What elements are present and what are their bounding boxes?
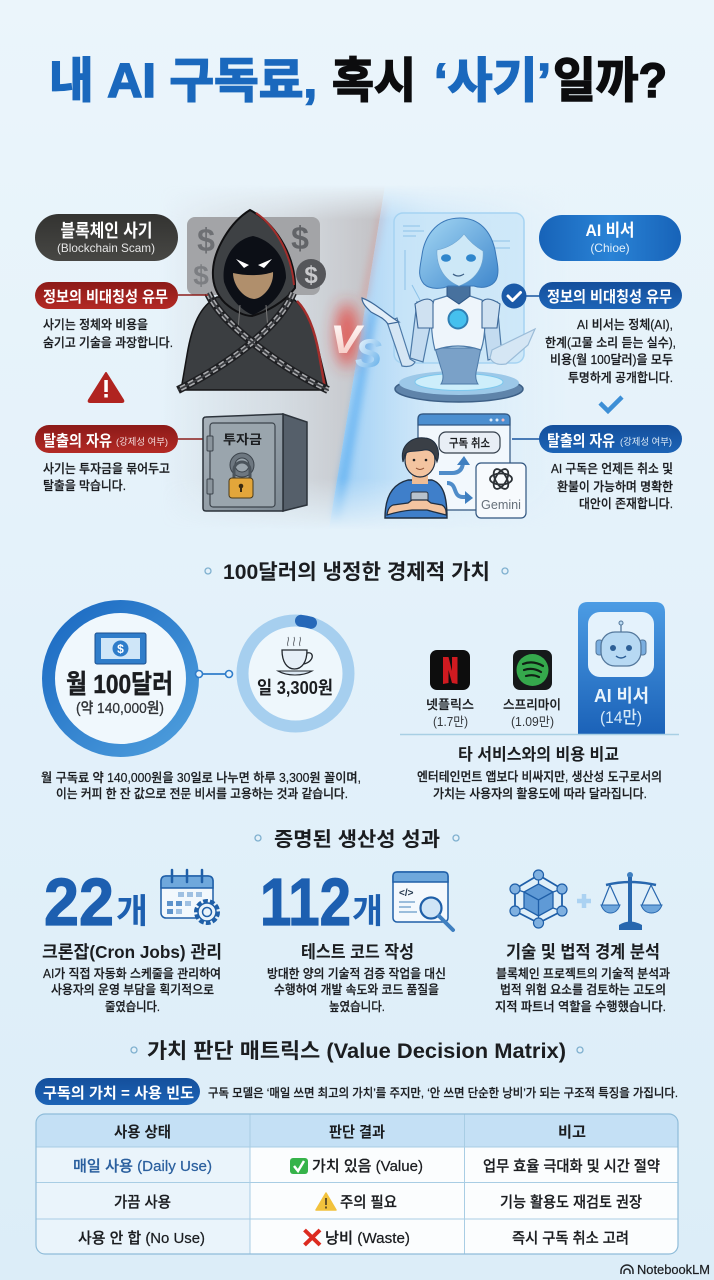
vs emblem: V (330, 318, 365, 362)
icon: hooded scammer in chains (178, 210, 328, 390)
icon: banknote (95, 633, 146, 664)
stat: tech and legal analysis: 블록체인 프로젝트의 기술적 분석과 (496, 967, 670, 981)
formula pill (35, 1078, 200, 1105)
stat: test code: 테스트 코드 작성 (301, 942, 414, 962)
versus background split (194, 190, 498, 524)
row: daily use (73, 1158, 660, 1175)
panel: monthly cost ring: 월 100달러 (66, 669, 173, 699)
stat: cron jobs: 크론잡(Cron Jobs) 관리 (42, 942, 222, 962)
text block: AI 구독은 언제든 취소 및 (551, 462, 673, 476)
stat: tech and legal analysis: 법적 위험 요소를 검토하는 고도의 (500, 982, 666, 997)
text block: comparison: 엔터테인먼트 앱보다 비싸지만, 생산성 도구로서의 (417, 770, 662, 784)
icon: robot (596, 621, 646, 666)
bar: ai assistant: AI 비서 (594, 686, 649, 706)
stat: cron jobs (42, 865, 222, 1014)
stat: test code: 높였습니다. (329, 1000, 385, 1014)
text block (551, 462, 673, 511)
icon: check badge (502, 284, 540, 308)
title: 일까? (553, 55, 667, 108)
stat: tech and legal analysis: 기술 및 법적 경계 분석 (506, 942, 660, 962)
person with phone (385, 438, 447, 518)
row: occasional use (114, 1193, 642, 1211)
title: ‘사기’ (434, 55, 551, 108)
icon: code window and magnifier (393, 872, 453, 930)
label: freedom to exit: (강제성 여부) (620, 436, 672, 448)
section heading: productivity: 증명된 생산성 성과 (274, 828, 440, 851)
row: daily use: 업무 효율 극대화 및 시간 절약 (483, 1158, 660, 1175)
icon: dollar backdrop: $ (193, 260, 209, 291)
stat: test code: 수행하여 개발 속도와 코드 품질을 (274, 982, 439, 997)
label: information asymmetry (539, 282, 682, 309)
label: freedom to exit (35, 425, 204, 453)
vs emblem: S (355, 332, 382, 376)
stat: cron jobs: AI가 직접 자동화 스케줄을 관리하여 (43, 967, 221, 981)
row: daily use: 매일 사용 (Daily Use) (73, 1158, 212, 1175)
text block: formula note: 구독 모델은 ‘매일 쓰면 최고의 가치’를 주지만, ‘안 쓰면 단순한 낭비’가 되는 구조적 특징을 가집니다. (208, 1086, 678, 1100)
text block (545, 318, 676, 385)
bar: spotify: (1.09만) (511, 715, 554, 729)
table header (114, 1124, 586, 1141)
scam badge: (Blockchain Scam) (57, 241, 155, 255)
text block: 사기는 정체와 비용을 (43, 318, 148, 332)
icon: warning sign (316, 1193, 336, 1210)
label: freedom to exit: (강제성 여부) (116, 436, 168, 448)
chart: service cost comparison (400, 602, 679, 734)
text block: 투명하게 공개합니다. (568, 370, 673, 385)
text block: monthly explanation (41, 770, 361, 801)
cancel button (439, 432, 500, 453)
section heading: economic value (30, 561, 685, 584)
torso (435, 348, 481, 384)
browser window (418, 414, 510, 510)
formula pill: 구독의 가치 = 사용 빈도 (43, 1085, 194, 1102)
platform (395, 376, 523, 402)
stat: cron jobs: 22 (44, 865, 114, 940)
text block: AI 비서는 정체(AI), (577, 318, 673, 332)
text block: 숨기고 기술을 과장합니다. (43, 335, 173, 350)
bar: ai assistant: (14만) (600, 708, 642, 727)
icon: dollar backdrop: $ (304, 262, 318, 289)
icon: check mark (600, 397, 622, 411)
text block (43, 462, 170, 493)
panel: monthly cost ring: (약 140,000원) (76, 700, 164, 717)
table header: 사용 상태 (114, 1124, 171, 1141)
bar: spotify (503, 650, 561, 729)
icon: dollar backdrop: $ (291, 220, 309, 256)
icon: code window and magnifier: </> (399, 888, 414, 899)
stat: test code (260, 865, 453, 1014)
row: no use: 즉시 구독 취소 고려 (512, 1230, 629, 1247)
stat: test code: 112 (260, 865, 351, 940)
notebooklm mark: NotebookLM (637, 1262, 710, 1277)
section heading: economic value: 100달러의 냉정한 경제적 가치 (223, 561, 490, 584)
stat: cron jobs: 줄였습니다. (105, 1000, 160, 1014)
switch arrows (439, 456, 473, 504)
icon: green check (290, 1158, 308, 1174)
row: daily use: 가치 있음 (Value) (312, 1158, 423, 1175)
cancel button: 구독 취소 (449, 437, 490, 450)
table: decision matrix (36, 1114, 678, 1254)
icon: plus (577, 894, 591, 908)
panel: ai assistant (362, 213, 682, 518)
assistant badge: (Chioe) (590, 241, 630, 255)
bar: ai assistant (578, 602, 665, 734)
stat: cron jobs: 개 (116, 893, 148, 931)
text block: 사기는 투자금을 묶어두고 (43, 462, 170, 476)
icon: locked safe: 투자금 (223, 432, 262, 447)
text block: comparison: 가치는 사용자의 활용도에 따라 달라집니다. (433, 786, 647, 801)
text block: 탈출을 막습니다. (43, 479, 126, 493)
icon: ai assistant hologram (362, 213, 535, 402)
table header: 비고 (558, 1124, 586, 1141)
label: freedom to exit: 탈출의 자유 (43, 432, 112, 450)
text block: monthly explanation: 이는 커피 한 잔 값으로 전문 비서를 고용하는 것과 같습니다. (56, 787, 348, 801)
label: information asymmetry: 정보의 비대칭성 유무 (43, 288, 168, 306)
stat: tech and legal analysis (495, 870, 670, 1014)
text block: 한계(고물 소리 듣는 실수), (545, 336, 676, 350)
table header: 판단 결과 (329, 1124, 385, 1141)
alternative service card (476, 463, 526, 518)
panel: blockchain scam (35, 210, 328, 511)
title (49, 55, 667, 108)
panel: daily cost ring: 일 3,300원 (257, 678, 333, 698)
row: no use: 낭비 (Waste) (325, 1230, 410, 1247)
icon: scales (601, 872, 662, 930)
label: information asymmetry (35, 282, 208, 309)
section heading: value decision matrix: 가치 판단 매트릭스 (Value Decision Matrix) (147, 1040, 566, 1063)
text block: comparison: 타 서비스와의 비용 비교 (458, 745, 619, 764)
stat: tech and legal analysis: 지적 파트너 역할을 수행했습니다. (495, 999, 666, 1014)
assistant badge (539, 215, 681, 261)
row: occasional use: 주의 필요 (340, 1194, 397, 1211)
assistant badge: AI 비서 (586, 221, 634, 240)
stat: test code: 방대한 양의 기술적 검증 작업을 대신 (267, 967, 446, 981)
text block (43, 318, 173, 350)
arms (410, 302, 433, 362)
bar: netflix (426, 650, 474, 729)
panel: monthly cost ring (48, 606, 192, 750)
vs emblem (330, 318, 382, 376)
icon: red cross (304, 1230, 320, 1245)
stat: cron jobs: 사용자의 운영 부담을 획기적으로 (51, 983, 214, 997)
bar: netflix: (1.7만) (433, 715, 468, 729)
hair and face (420, 218, 498, 288)
illustration: user cancels and switches (385, 414, 526, 518)
section heading: productivity (30, 828, 685, 851)
label: freedom to exit (512, 425, 682, 453)
text block: 환불이 가능하며 명확한 (557, 480, 673, 494)
row: occasional use: 기능 활용도 재검토 권장 (500, 1194, 642, 1211)
icon: locked safe (203, 414, 307, 511)
icon: dollar backdrop (187, 217, 326, 295)
title: 혹시 (332, 55, 416, 108)
label: information asymmetry: 정보의 비대칭성 유무 (547, 288, 672, 306)
text block: 대안이 존재합니다. (579, 496, 673, 511)
stat: test code: 개 (352, 893, 383, 931)
bar: spotify: 스프리마이 (503, 698, 561, 712)
alternative service card: Gemini (481, 497, 521, 512)
scam badge: 블록체인 사기 (60, 221, 152, 241)
chains (178, 293, 328, 390)
icon: coffee cup (278, 637, 312, 675)
text block: comparison (417, 745, 662, 801)
icon: blockchain cube (510, 870, 567, 928)
icon: banknote: $ (117, 642, 124, 656)
title: 내 AI 구독료, (49, 55, 317, 108)
icon: warning triangle (89, 373, 123, 402)
row: no use (78, 1230, 629, 1247)
label: freedom to exit: 탈출의 자유 (547, 432, 615, 450)
section heading: value decision matrix (30, 1040, 685, 1063)
icon: dollar backdrop: $ (197, 222, 215, 258)
text block: monthly explanation: 월 구독료 약 140,000원을 30일로 나누면 하루 3,300원 꼴이며, (41, 770, 361, 785)
row: occasional use: 가끔 사용 (114, 1194, 171, 1211)
bar: netflix: 넷플릭스 (426, 698, 474, 712)
scam badge (35, 214, 178, 261)
panel: daily cost ring (242, 620, 348, 726)
row: no use: 사용 안 합 (No Use) (78, 1230, 205, 1247)
text block: 비용(월 100달러)을 모두 (550, 352, 673, 367)
connector (196, 670, 232, 678)
icon: calendar and gear (161, 870, 218, 922)
